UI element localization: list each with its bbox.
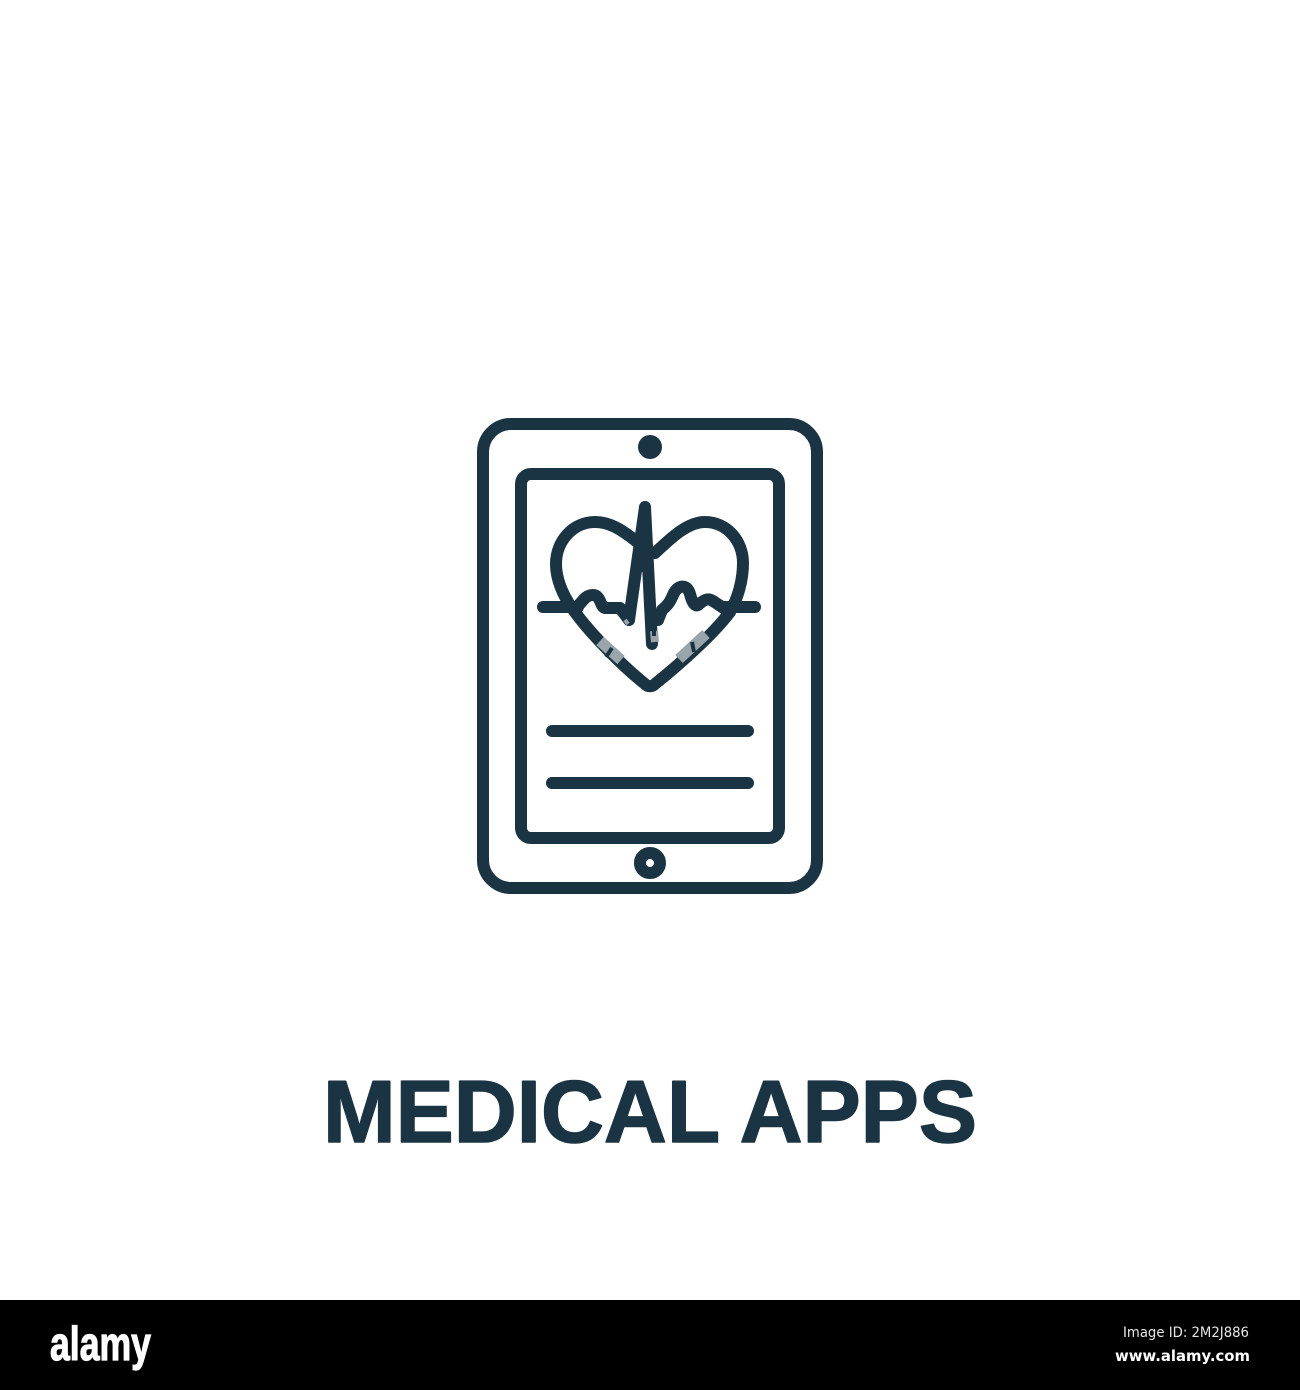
icon: heart outline [556,522,743,686]
tablet outer body [483,424,817,888]
tablet home button [640,853,660,873]
tablet camera dot [638,435,662,459]
baseline left of pulse [543,601,578,613]
website url: www.alamy.com [1115,1347,1250,1365]
watermark fragments over heart [600,620,706,660]
text line 1 [552,725,748,737]
pulse waveform right [658,587,725,620]
footer bar [0,1300,1300,1390]
pulse spike [629,507,652,644]
watermark letter gaps [606,628,694,657]
pulse waveform left [576,595,629,620]
spike solid core [640,520,652,572]
icon: tablet with heart rate [483,424,817,888]
text line 2 [552,777,748,789]
tablet screen [521,474,779,838]
title: MEDICAL APPS [323,1062,977,1161]
footer logo: alamy [50,1317,151,1370]
image id: Image ID: 2M2J886 [1123,1325,1249,1341]
baseline right of pulse [722,601,755,613]
